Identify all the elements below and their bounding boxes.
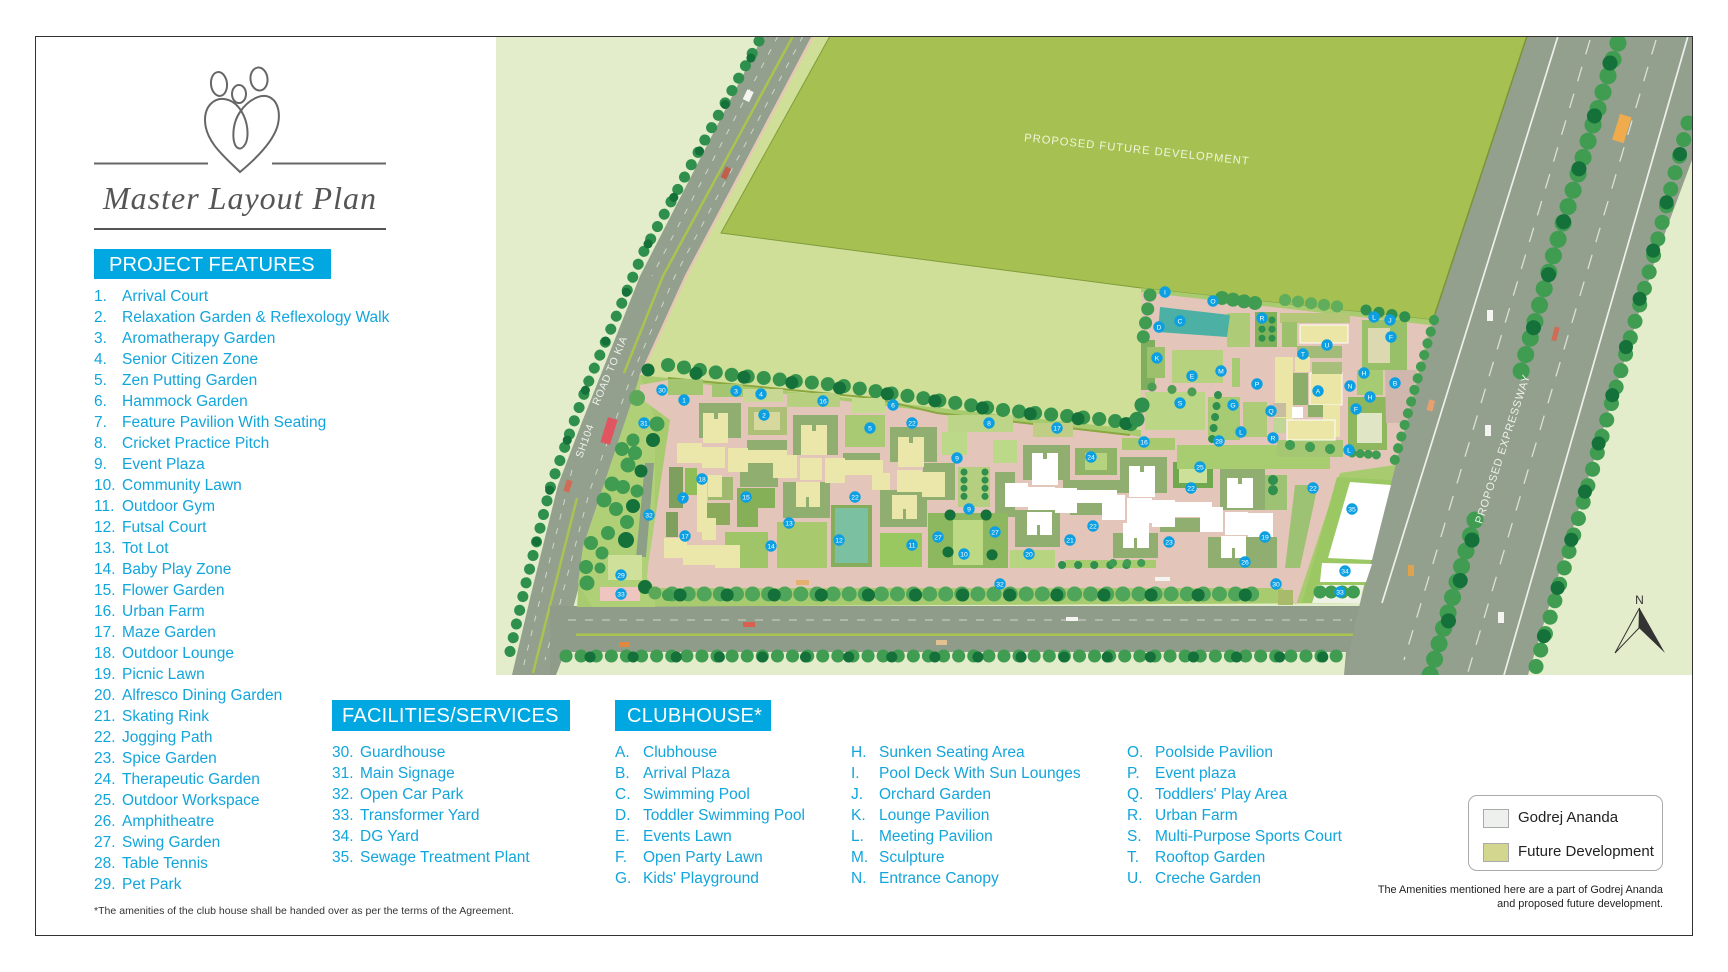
- legend swatch: Godrej Ananda: [1483, 809, 1509, 828]
- list: clubhouse column 3: Toddlers' Play Area: [1155, 786, 1287, 803]
- map: [496, 37, 1692, 675]
- list: project features: Flower Garden: [122, 582, 225, 599]
- map markers: O: [1210, 298, 1216, 305]
- map markers: 15: [742, 494, 750, 501]
- list: clubhouse column 2: L.: [851, 828, 864, 845]
- north arrow: [1615, 593, 1665, 653]
- road: proposed expressway: [1344, 36, 1692, 675]
- map markers: 14: [767, 543, 775, 550]
- parcel: transformer yard: [600, 587, 640, 601]
- map markers: B: [1393, 380, 1398, 387]
- map markers: C: [1178, 318, 1183, 325]
- list: project features: 2.: [94, 309, 107, 326]
- trees: clubhouse perimeter: [1135, 295, 1434, 470]
- map markers: 27: [934, 534, 942, 541]
- trees: lower road row: [566, 656, 1340, 657]
- list: clubhouse column 3: Multi-Purpose Sports Court: [1155, 828, 1342, 845]
- map markers: F: [1389, 334, 1393, 341]
- list: project features: 21.: [94, 708, 116, 725]
- list: project features: Zen Putting Garden: [122, 372, 257, 389]
- title: Master Layout Plan: [103, 180, 377, 216]
- list: clubhouse column 3: [1127, 744, 1342, 887]
- legend: [1468, 795, 1663, 871]
- map markers: 32: [996, 581, 1004, 588]
- list: clubhouse column 1: F.: [615, 849, 627, 866]
- list: project features: 7.: [94, 414, 107, 431]
- list: clubhouse column 2: Sunken Seating Area: [879, 744, 1025, 761]
- map markers: Q: [1268, 408, 1274, 415]
- map markers: [615, 286, 1401, 600]
- map markers: 35: [1348, 506, 1356, 513]
- trees: [508, 41, 1688, 675]
- map markers: 2: [762, 412, 766, 419]
- vehicles: [563, 89, 1632, 647]
- residential buildings: white: [1005, 453, 1273, 558]
- map markers: 12: [835, 537, 843, 544]
- list: project features: Alfresco Dining Garden: [122, 687, 282, 704]
- list: facilities: DG Yard: [360, 828, 419, 845]
- map markers: 9: [955, 455, 959, 462]
- list: facilities: Open Car Park: [360, 786, 463, 803]
- label: road to kia: ROAD TO KIA: [590, 334, 630, 407]
- map markers: L: [1372, 314, 1376, 321]
- list: project features: Aromatherapy Garden: [122, 330, 275, 347]
- note: [1378, 884, 1663, 910]
- map markers: 13: [785, 520, 793, 527]
- map markers: 22: [1089, 523, 1097, 530]
- footnote: *The amenities of the club house shall be handed over as per the terms of the Agreement.: [94, 905, 514, 917]
- map markers: E: [1190, 373, 1195, 380]
- map markers: F: [1354, 406, 1358, 413]
- list: project features: 28.: [94, 855, 116, 872]
- map markers: D: [1157, 324, 1162, 331]
- list: clubhouse column 2: Lounge Pavilion: [879, 807, 989, 824]
- list: project features: Relaxation Garden & Reflexology Walk: [122, 309, 389, 326]
- list: clubhouse column 2: M.: [851, 849, 868, 866]
- map markers: 8: [987, 420, 991, 427]
- list: clubhouse column 3: R.: [1127, 807, 1142, 824]
- list: project features: Futsal Court: [122, 519, 206, 536]
- list: clubhouse column 2: Sculpture: [879, 849, 944, 866]
- map markers: N: [1348, 383, 1353, 390]
- list: clubhouse column 1: D.: [615, 807, 630, 824]
- list: project features: Spice Garden: [122, 750, 217, 767]
- list: clubhouse column 3: Urban Farm: [1155, 807, 1238, 824]
- future development land: [577, 36, 1527, 607]
- map markers: 6: [891, 402, 895, 409]
- map markers: L: [1347, 447, 1351, 454]
- list: project features: 25.: [94, 792, 116, 809]
- list: project features: 17.: [94, 624, 116, 641]
- list: project features: Picnic Lawn: [122, 666, 205, 683]
- list: project features: Arrival Court: [122, 288, 208, 305]
- list: project features: 29.: [94, 876, 116, 893]
- car park strip: [636, 463, 654, 557]
- tower notches: white: [1037, 453, 1242, 558]
- title rule: [94, 228, 386, 230]
- tower gardens: [666, 403, 1287, 568]
- list: project features: 20.: [94, 687, 116, 704]
- list: project features: [94, 288, 390, 893]
- map markers: 17: [1053, 425, 1061, 432]
- map markers: 22: [908, 420, 916, 427]
- road labels: [574, 334, 1533, 525]
- tower notches: cream: [714, 413, 913, 519]
- map markers: 30: [1272, 581, 1280, 588]
- list: clubhouse column 3: Q.: [1127, 786, 1143, 803]
- heading: facilities: [332, 700, 570, 731]
- road: horizontal road: [550, 606, 1360, 675]
- swimming pool: [1158, 307, 1230, 337]
- list: project features: Hammock Garden: [122, 393, 248, 410]
- list: clubhouse column 1: Clubhouse: [643, 744, 717, 761]
- background land: [496, 36, 1692, 675]
- list: facilities: 30.: [332, 744, 354, 761]
- label: proposed future development: PROPOSED FUTURE DEVELOPMENT: [1024, 132, 1250, 168]
- list: clubhouse column 2: Entrance Canopy: [879, 870, 999, 887]
- list: clubhouse column 2: Meeting Pavilion: [879, 828, 993, 845]
- heading: clubhouse: [615, 700, 771, 731]
- list: project features: 12.: [94, 519, 116, 536]
- list: clubhouse column 1: E.: [615, 828, 630, 845]
- map markers: H: [1362, 370, 1367, 377]
- map markers: 25: [1196, 464, 1204, 471]
- map markers: 27: [991, 529, 999, 536]
- list: clubhouse column 3: P.: [1127, 765, 1140, 782]
- map markers: 29: [617, 572, 625, 579]
- legend label: Godrej Ananda: Godrej Ananda: [1518, 809, 1618, 826]
- list: project features: 4.: [94, 351, 107, 368]
- list: clubhouse column 1: Toddler Swimming Pool: [643, 807, 805, 824]
- map markers: A: [1316, 388, 1321, 395]
- list: facilities: [332, 744, 530, 866]
- list: project features: 1.: [94, 288, 107, 305]
- list: clubhouse column 1: [615, 744, 805, 887]
- clubhouse building: [1273, 325, 1348, 440]
- map markers: 17: [681, 533, 689, 540]
- map markers: 33: [1336, 589, 1344, 596]
- list: clubhouse column 2: N.: [851, 870, 866, 887]
- label: SH104: SH104: [574, 422, 597, 460]
- map markers: 5: [868, 425, 872, 432]
- trees: site top row: [648, 365, 1135, 425]
- trees: site front row: [672, 592, 1364, 595]
- map markers: S: [1178, 400, 1183, 407]
- list: clubhouse column 1: Events Lawn: [643, 828, 732, 845]
- map markers: M: [1218, 368, 1224, 375]
- trees: left park: [579, 390, 674, 601]
- list: project features: Senior Citizen Zone: [122, 351, 258, 368]
- list: facilities: Main Signage: [360, 765, 455, 782]
- list: clubhouse column 2: I.: [851, 765, 860, 782]
- map markers: 3: [734, 388, 738, 395]
- north arrow: N: [1635, 593, 1644, 607]
- list: project features: 24.: [94, 771, 116, 788]
- heading: facilities: FACILITIES/SERVICES: [342, 705, 559, 727]
- map markers: 23: [1165, 539, 1173, 546]
- map markers: P: [1255, 381, 1260, 388]
- list: project features: Outdoor Gym: [122, 498, 215, 515]
- map markers: 22: [1187, 485, 1195, 492]
- list: project features: Community Lawn: [122, 477, 242, 494]
- map markers: 33: [617, 591, 625, 598]
- list: clubhouse column 1: Arrival Plaza: [643, 765, 730, 782]
- map markers: G: [1230, 402, 1236, 409]
- map markers: K: [1155, 355, 1160, 362]
- list: facilities: 34.: [332, 828, 354, 845]
- list: project features: 18.: [94, 645, 116, 662]
- list: project features: 5.: [94, 372, 107, 389]
- residential buildings: cream: [664, 413, 945, 568]
- trees: expressway edge: [1535, 123, 1688, 670]
- list: project features: 6.: [94, 393, 107, 410]
- list: project features: 9.: [94, 456, 107, 473]
- map markers: 4: [759, 391, 763, 398]
- map markers: 26: [1241, 559, 1249, 566]
- list: clubhouse column 1: Open Party Lawn: [643, 849, 763, 866]
- list: clubhouse column 3: Poolside Pavilion: [1155, 744, 1273, 761]
- list: clubhouse column 3: Creche Garden: [1155, 870, 1261, 887]
- list: project features: Event Plaza: [122, 456, 205, 473]
- list: project features: Maze Garden: [122, 624, 216, 641]
- list: project features: Urban Farm: [122, 603, 205, 620]
- list: project features: 26.: [94, 813, 116, 830]
- label: proposed expressway: PROPOSED EXPRESSWAY: [1473, 373, 1533, 525]
- list: facilities: 31.: [332, 765, 354, 782]
- list: facilities: Transformer Yard: [360, 807, 479, 824]
- list: clubhouse column 3: Rooftop Garden: [1155, 849, 1265, 866]
- list: clubhouse column 1: C.: [615, 786, 630, 803]
- map markers: L: [1239, 429, 1243, 436]
- list: clubhouse column 2: [851, 744, 1081, 887]
- list: facilities: Guardhouse: [360, 744, 445, 761]
- list: project features: 15.: [94, 582, 116, 599]
- list: project features: Feature Pavilion With Seating: [122, 414, 326, 431]
- list: clubhouse column 1: A.: [615, 744, 630, 761]
- map markers: H: [1368, 394, 1373, 401]
- map markers: 11: [908, 542, 916, 549]
- map markers: I: [1164, 289, 1166, 296]
- map markers: 21: [1066, 537, 1074, 544]
- list: project features: 23.: [94, 750, 116, 767]
- list: clubhouse column 1: G.: [615, 870, 631, 887]
- clubhouse gardens: [1141, 312, 1417, 457]
- sewage treatment plant: [1302, 477, 1392, 603]
- map markers: U: [1325, 342, 1330, 349]
- list: project features: 3.: [94, 330, 107, 347]
- list: project features: Swing Garden: [122, 834, 220, 851]
- map markers: T: [1301, 351, 1305, 358]
- list: project features: Jogging Path: [122, 729, 212, 746]
- list: project features: Table Tennis: [122, 855, 208, 872]
- list: clubhouse column 1: Swimming Pool: [643, 786, 750, 803]
- heading: clubhouse: CLUBHOUSE*: [627, 705, 762, 727]
- list: facilities: Sewage Treatment Plant: [360, 849, 530, 866]
- list: facilities: 33.: [332, 807, 354, 824]
- lawn: pet park: [608, 555, 642, 580]
- list: project features: Pet Park: [122, 876, 181, 893]
- list: project features: Outdoor Lounge: [122, 645, 234, 662]
- list: clubhouse column 3: Event plaza: [1155, 765, 1236, 782]
- legend swatch: Future Development: [1483, 843, 1509, 862]
- list: project features: Baby Play Zone: [122, 561, 231, 578]
- list: clubhouse column 2: H.: [851, 744, 866, 761]
- map markers: 30: [658, 387, 666, 394]
- map markers: J: [1388, 317, 1392, 324]
- list: project features: 22.: [94, 729, 116, 746]
- map markers: 31: [640, 420, 648, 427]
- map markers: 20: [1025, 551, 1033, 558]
- list: clubhouse column 3: U.: [1127, 870, 1142, 887]
- list: clubhouse column 2: Pool Deck With Sun Lounges: [879, 765, 1081, 782]
- list: clubhouse column 1: B.: [615, 765, 630, 782]
- list: project features: 16.: [94, 603, 116, 620]
- futsal court: [831, 505, 872, 567]
- map markers: R: [1260, 315, 1265, 322]
- list: clubhouse column 2: Orchard Garden: [879, 786, 991, 803]
- list: facilities: 32.: [332, 786, 354, 803]
- map markers: 19: [1261, 534, 1269, 541]
- list: project features: Tot Lot: [122, 540, 169, 557]
- list: facilities: 35.: [332, 849, 354, 866]
- trees: expressway median: [1430, 43, 1618, 675]
- legend label: Future Development: Future Development: [1518, 843, 1654, 860]
- map markers: 32: [645, 512, 653, 519]
- list: project features: 14.: [94, 561, 116, 578]
- map markers: 22: [1309, 485, 1317, 492]
- list: project features: 13.: [94, 540, 116, 557]
- list: project features: Outdoor Workspace: [122, 792, 260, 809]
- list: project features: Amphitheatre: [122, 813, 214, 830]
- list: project features: Therapeutic Garden: [122, 771, 260, 788]
- road: SH104: [512, 36, 813, 675]
- logo: family heart: [94, 66, 386, 174]
- list: project features: 10.: [94, 477, 116, 494]
- map markers: 24: [1087, 454, 1095, 461]
- map markers: 9: [967, 506, 971, 513]
- lawns: [668, 379, 1330, 605]
- trees: SH104 edge: [508, 41, 759, 660]
- map markers: 16: [1140, 439, 1148, 446]
- list: clubhouse column 1: Kids' Playground: [643, 870, 759, 887]
- list: clubhouse column 3: S.: [1127, 828, 1142, 845]
- list: project features: Skating Rink: [122, 708, 209, 725]
- list: clubhouse column 2: J.: [851, 786, 863, 803]
- site base: [577, 288, 1433, 607]
- list: project features: 27.: [94, 834, 116, 851]
- heading: project features: PROJECT FEATURES: [109, 254, 315, 276]
- map markers: R: [1271, 435, 1276, 442]
- map markers: 10: [960, 551, 968, 558]
- list: clubhouse column 2: K.: [851, 807, 866, 824]
- list: project features: 11.: [94, 498, 114, 515]
- list: project features: 8.: [94, 435, 107, 452]
- note: The Amenities mentioned here are a part of Godrej Ananda: [1378, 884, 1663, 896]
- trees: garden accents: [948, 472, 1273, 565]
- map markers: 18: [698, 476, 706, 483]
- map markers: 22: [851, 494, 859, 501]
- list: project features: Cricket Practice Pitch: [122, 435, 269, 452]
- list: clubhouse column 3: O.: [1127, 744, 1143, 761]
- map markers: 7: [681, 495, 685, 502]
- map markers: 34: [1341, 568, 1349, 575]
- map markers: 1: [682, 397, 686, 404]
- list: clubhouse column 3: T.: [1127, 849, 1139, 866]
- heading: project features: [94, 249, 331, 279]
- map markers: 28: [1215, 438, 1223, 445]
- list: project features: 19.: [94, 666, 116, 683]
- note: and proposed future development.: [1497, 898, 1663, 910]
- map markers: 16: [819, 398, 827, 405]
